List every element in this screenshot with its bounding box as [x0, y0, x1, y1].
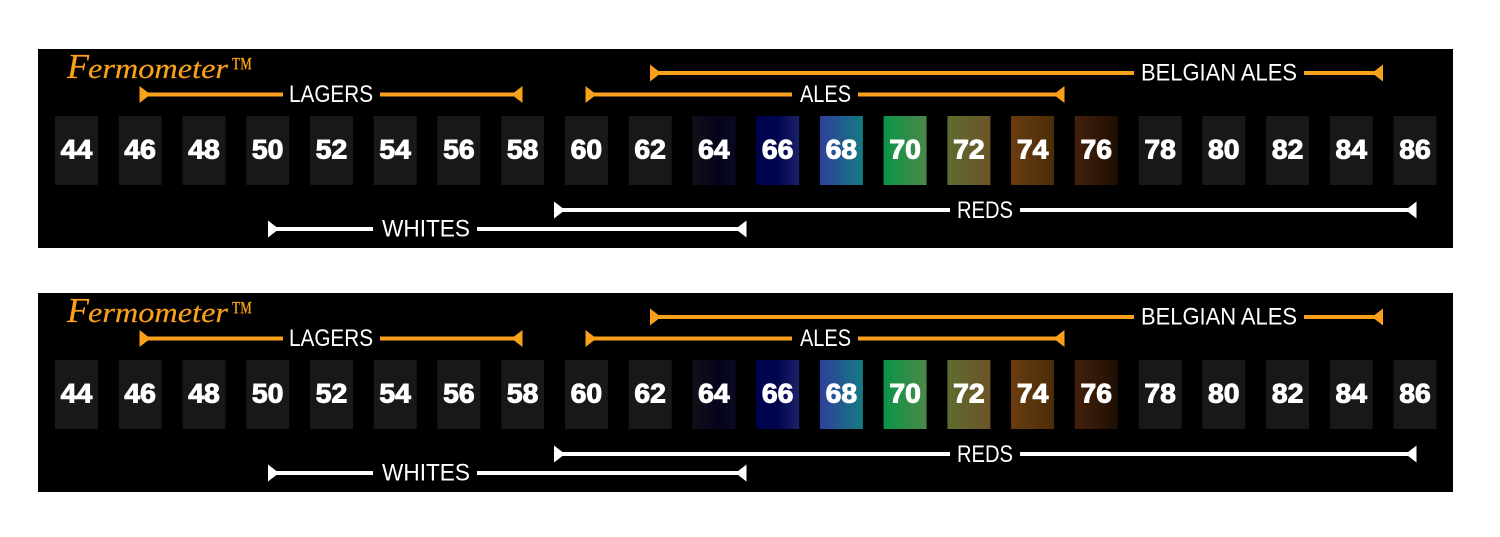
title: Fermometer: F	[66, 47, 90, 86]
range: Belgian ales	[650, 304, 1383, 330]
temperature scale: 80	[1208, 378, 1240, 408]
range: Reds: REDS	[957, 441, 1013, 468]
range: Lagers	[140, 325, 522, 352]
range: Reds	[554, 197, 1416, 224]
range: Belgian ales: BELGIAN ALES	[1141, 304, 1297, 330]
temperature scale: 62	[634, 378, 666, 408]
range: Lagers: LAGERS	[289, 325, 373, 352]
temperature scale: 60	[571, 378, 602, 408]
temperature scale: 48	[188, 134, 220, 164]
title: Fermometer: ™	[231, 52, 252, 84]
temperature scale: 50	[252, 378, 283, 408]
temperature scale: 68	[826, 134, 857, 164]
temperature scale: 46	[124, 378, 156, 408]
range: Ales: ALES	[800, 325, 851, 352]
temperature scale: 60	[571, 134, 602, 164]
temperature scale: 68	[826, 378, 857, 408]
range: Whites: WHITES	[382, 216, 470, 242]
title: Fermometer: ™	[231, 296, 252, 328]
panel: top fermometer strip	[38, 47, 1453, 248]
range: Lagers: LAGERS	[289, 81, 373, 108]
temperature scale: 72	[953, 378, 985, 408]
temperature scale: 54	[379, 134, 411, 164]
temperature scale: 86	[1399, 134, 1431, 164]
range: Whites	[268, 216, 746, 242]
temperature scale: 66	[762, 134, 793, 164]
range: Reds: REDS	[957, 197, 1013, 224]
range: Whites	[268, 460, 746, 486]
temperature scale: 76	[1081, 134, 1112, 164]
temperature scale: 74	[1017, 134, 1049, 164]
temperature scale: 70	[889, 378, 921, 408]
range: Ales: ALES	[800, 81, 851, 108]
temperature scale: 76	[1081, 378, 1112, 408]
title: Fermometer: ermometer	[88, 53, 229, 85]
temperature scale: 52	[316, 378, 347, 408]
temperature scale	[55, 360, 1436, 429]
temperature scale: 82	[1272, 378, 1303, 408]
range: Belgian ales: BELGIAN ALES	[1141, 60, 1297, 86]
temperature scale: 44	[61, 378, 93, 408]
temperature scale: 64	[698, 134, 730, 164]
temperature scale: 58	[507, 378, 538, 408]
temperature scale: 46	[124, 134, 156, 164]
temperature scale: 66	[762, 378, 793, 408]
temperature scale: 58	[507, 134, 538, 164]
temperature scale: 54	[379, 378, 411, 408]
temperature scale	[55, 116, 1436, 185]
range: Reds	[554, 441, 1416, 468]
temperature scale: 78	[1144, 134, 1176, 164]
temperature scale: 64	[698, 378, 730, 408]
temperature scale: 72	[953, 134, 985, 164]
temperature scale: 56	[443, 134, 475, 164]
title: Fermometer: ermometer	[88, 297, 229, 329]
temperature scale: 74	[1017, 378, 1049, 408]
title: Fermometer: F	[66, 291, 90, 330]
temperature scale: 70	[889, 134, 921, 164]
range: Whites: WHITES	[382, 460, 470, 486]
range: Ales	[586, 325, 1064, 352]
range: Lagers	[140, 81, 522, 108]
temperature scale: 84	[1336, 378, 1367, 408]
panel: bottom fermometer strip	[38, 291, 1453, 492]
temperature scale: 84	[1336, 134, 1367, 164]
temperature scale: 80	[1208, 134, 1240, 164]
temperature scale: 56	[443, 378, 475, 408]
temperature scale: 62	[634, 134, 666, 164]
temperature scale: 82	[1272, 134, 1303, 164]
temperature scale: 44	[61, 134, 93, 164]
range: Ales	[586, 81, 1064, 108]
temperature scale: 52	[316, 134, 347, 164]
temperature scale: 50	[252, 134, 283, 164]
temperature scale: 78	[1144, 378, 1176, 408]
range: Belgian ales	[650, 60, 1383, 86]
temperature scale: 86	[1399, 378, 1431, 408]
temperature scale: 48	[188, 378, 220, 408]
